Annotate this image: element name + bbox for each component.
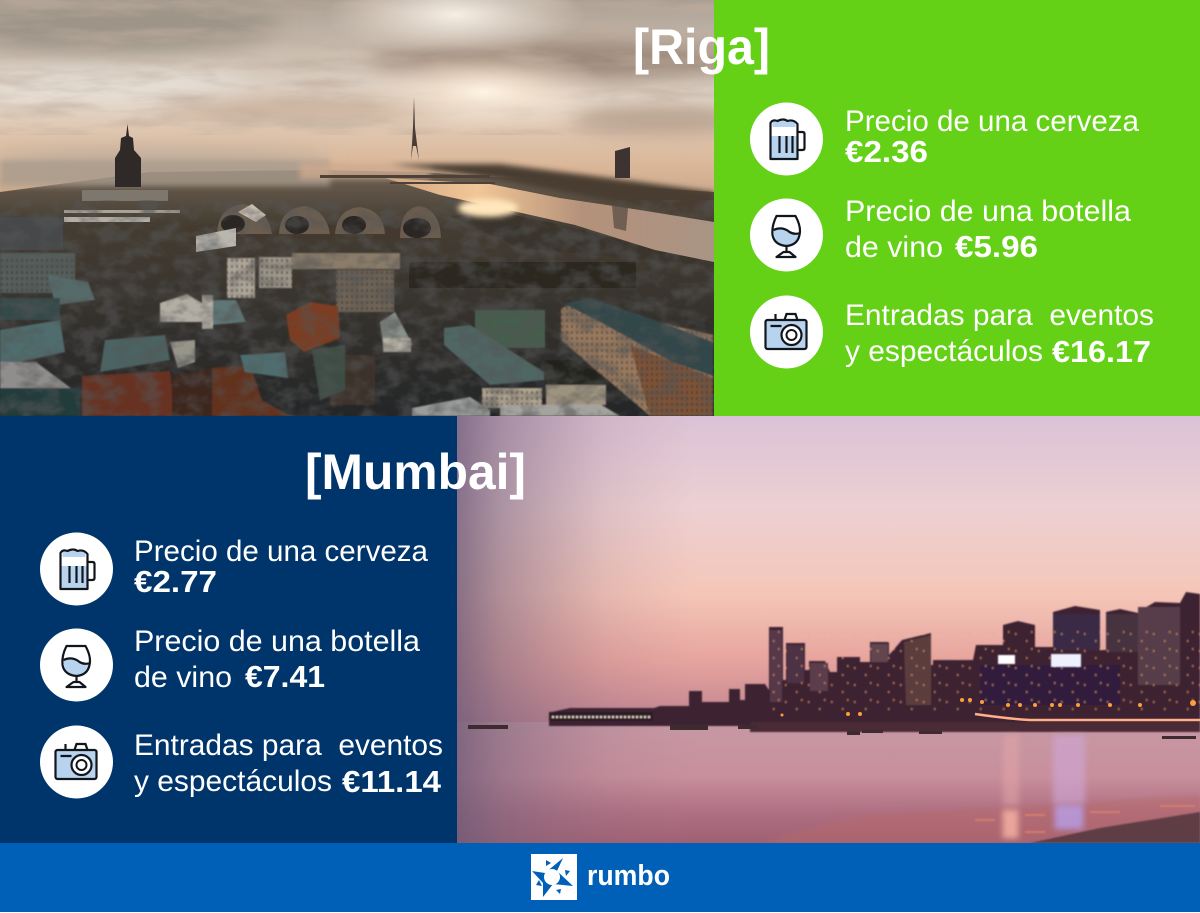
- boats: [468, 725, 1196, 739]
- text: Riga beer price: [845, 105, 1139, 169]
- bridge: [320, 175, 490, 178]
- logo: rumbo: [531, 854, 670, 900]
- text: Riga wine price: €5.96: [955, 229, 1038, 264]
- photo: Mumbai bay at dusk: [457, 416, 1200, 843]
- old town buildings: [0, 253, 713, 416]
- text: Mumbai wine price: €7.41: [245, 659, 325, 694]
- text: Mumbai beer price: €2.77: [134, 564, 217, 599]
- text: Riga wine price: de vino: [845, 231, 943, 264]
- text: Mumbai events price: y espectáculos: [134, 765, 332, 798]
- text: Riga events price: [845, 299, 1154, 369]
- text: Mumbai wine price: [134, 625, 420, 694]
- text: Mumbai events price: €11.14: [342, 764, 442, 799]
- text: Mumbai events price: [134, 729, 443, 799]
- text: Mumbai events price: Entradas para eventos: [134, 729, 443, 762]
- reflections: [760, 735, 1200, 843]
- central market and quay: [0, 190, 636, 288]
- photo: Riga skyline at sunset: [0, 0, 750, 416]
- icon: beer mug (Riga): [750, 102, 823, 176]
- text: Mumbai beer price: [134, 535, 428, 599]
- icon: camera (Riga): [750, 296, 823, 368]
- heading: Mumbai: [Mumbai]: [305, 444, 526, 500]
- landmarks: [115, 124, 141, 187]
- text: Riga events price: Entradas para eventos: [845, 299, 1154, 332]
- skyline: [549, 592, 1200, 732]
- logo: rumbo: rumbo: [587, 860, 670, 892]
- icon: camera (Mumbai): [40, 726, 113, 798]
- text: Riga events price: €16.17: [1052, 334, 1151, 369]
- panel: Riga green background: [714, 0, 1200, 416]
- text: Mumbai wine price: de vino: [134, 661, 232, 694]
- text: Riga events price: y espectáculos: [845, 335, 1043, 368]
- footer band: [0, 843, 1200, 912]
- text: Riga wine price: [845, 195, 1131, 264]
- icon: beer mug (Mumbai): [40, 532, 113, 606]
- billboards and lights: [780, 654, 1200, 720]
- text: Mumbai beer price: Precio de una cerveza: [134, 535, 428, 568]
- text: Riga wine price: Precio de una botella: [845, 195, 1131, 228]
- panel: Mumbai navy background: [0, 416, 457, 843]
- text: Riga beer price: €2.36: [845, 134, 928, 169]
- heading: Riga: [Riga]: [633, 19, 770, 75]
- icon: wine glass (Riga): [750, 198, 823, 272]
- text: Mumbai wine price: Precio de una botella: [134, 625, 420, 658]
- river: [385, 178, 714, 262]
- icon: wine glass (Mumbai): [40, 628, 113, 702]
- text: Riga beer price: Precio de una cerveza: [845, 105, 1139, 138]
